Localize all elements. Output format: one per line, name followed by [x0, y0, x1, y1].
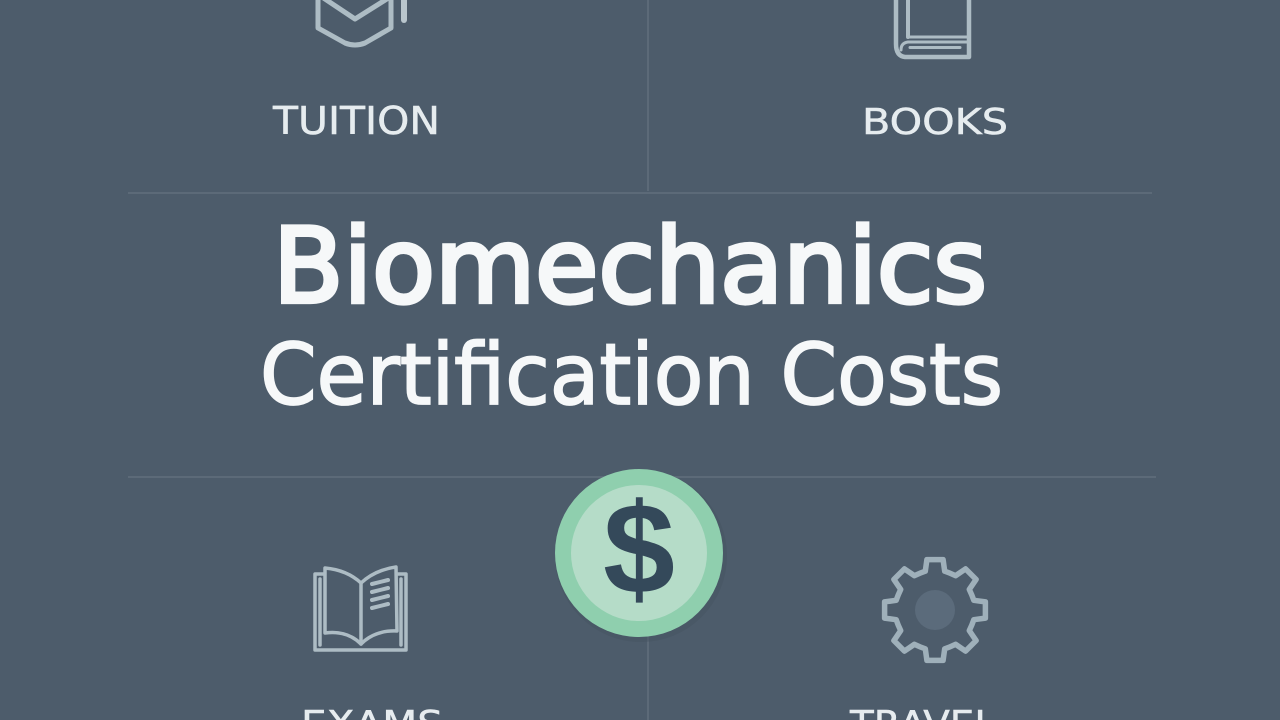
- panel: books: [862, 0, 1008, 143]
- label: books: BOOKS: [862, 102, 1008, 143]
- label: tuition: TUITION: [272, 99, 440, 143]
- panel: tuition: [272, 0, 440, 143]
- panel: travel: [849, 560, 996, 720]
- icon: gear: [885, 560, 985, 660]
- title: [260, 207, 1003, 425]
- icon: book: [896, 0, 969, 57]
- title line 1: Biomechanics: [273, 207, 987, 327]
- icon: dollar coin: $: [603, 477, 675, 621]
- title line 2: Certification Costs: [260, 326, 1003, 425]
- icon: graduation cap: [318, 0, 404, 45]
- icon: dollar coin: [555, 469, 727, 642]
- panel: exams: [301, 567, 443, 720]
- icon: open book: [315, 567, 406, 650]
